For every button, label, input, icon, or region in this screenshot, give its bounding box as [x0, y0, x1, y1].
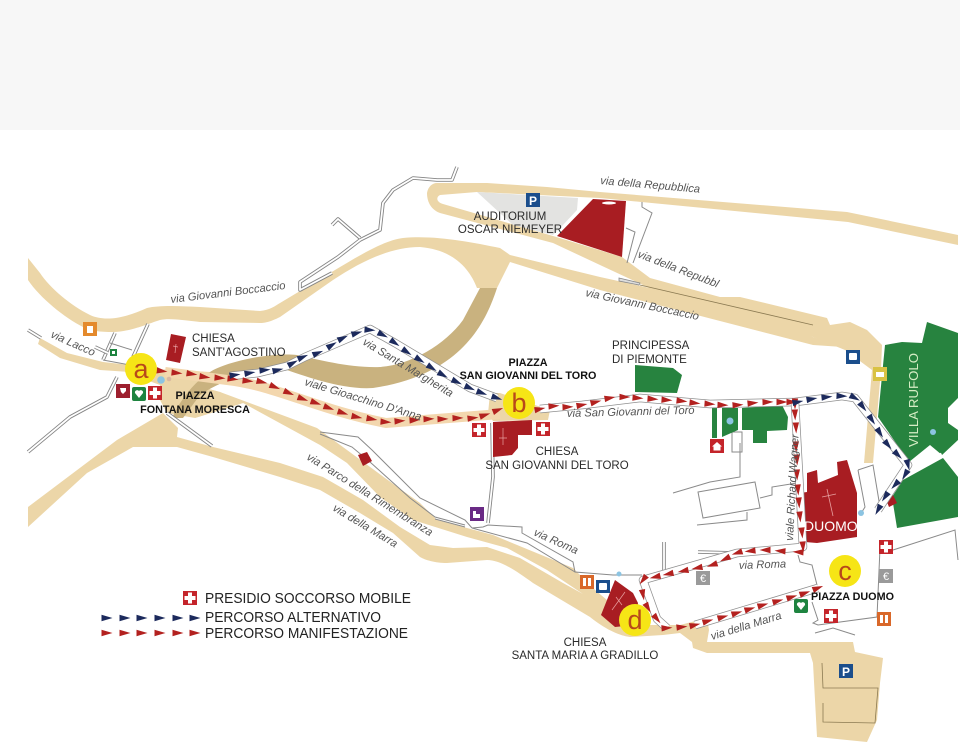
label: Auditorium Oscar Niemeyer: OSCAR NIEMEYER [458, 224, 562, 236]
icon: bus lower [596, 580, 610, 593]
route: percorso manifestazione (red arrows) a to b [162, 371, 498, 422]
road labels: via della Marra [709, 610, 783, 643]
marker d: d [627, 605, 643, 635]
building: auditorium parking [477, 192, 578, 235]
icon: euro duomo: € [883, 571, 889, 583]
label: Piazza Fontana Moresca: PIAZZA [176, 390, 214, 402]
icon: parking auditorium: P [529, 194, 537, 208]
icon: small green marker [110, 349, 117, 356]
thin markings on roads and parking [640, 285, 878, 723]
icon: toilets piazza duomo [877, 612, 891, 626]
icon: bus upper [846, 350, 860, 364]
icon: first aid piazza duomo [824, 609, 838, 623]
road labels: via della Repubbl [636, 249, 721, 291]
label: Piazza San Giovanni del Toro: SAN GIOVANNI DEL TORO [460, 370, 596, 382]
marker c [829, 555, 861, 587]
road labels [49, 175, 802, 643]
label: Chiesa Santa Maria a Gradillo: CHIESA [564, 637, 606, 649]
label: Principessa di Piemonte: PRINCIPESSA [612, 340, 689, 352]
icon: first aid b left [472, 423, 486, 437]
icon: toilets fontana moresca [116, 384, 130, 398]
road labels: via della Repubblica [600, 175, 701, 196]
road labels: via Giovanni Boccaccio [170, 280, 286, 306]
icon: red house [710, 439, 724, 453]
icon: euro via Roma: € [700, 573, 706, 585]
building: Santa Maria a Gradillo [601, 580, 638, 627]
building: Chiesa San Giovanni del Toro [493, 420, 532, 457]
route: street beds [230, 329, 908, 628]
building: Duomo [800, 460, 857, 543]
route: percorso manifestazione (red arrows) b to via Wagner [540, 397, 792, 409]
label: Duomo: DUOMO [804, 518, 858, 534]
route: percorso alternativo (blue arrows) via Santa Margherita [235, 330, 497, 398]
green areas: Villa Rufolo and gardens [635, 322, 958, 528]
label: Chiesa Sant'Agostino: CHIESA [192, 333, 235, 345]
minor streets [28, 167, 958, 635]
icon: parking auditorium [526, 193, 540, 208]
road labels: via Lacco [49, 329, 97, 359]
label: Auditorium Oscar Niemeyer: AUDITORIUM [474, 211, 546, 223]
building: auditorium Oscar Niemeyer [557, 199, 626, 257]
legend [107, 591, 411, 642]
icon: euro via Roma [696, 571, 710, 585]
marker a [125, 353, 157, 385]
icon: first aid duomo [879, 540, 893, 554]
icon: first aid a [148, 386, 162, 400]
label: Chiesa San Giovanni del Toro: CHIESA [536, 446, 578, 458]
road labels: via San Giovanni del Toro [567, 405, 695, 420]
road labels: viale Gioacchino D'Anna [303, 376, 423, 423]
label: Chiesa San Giovanni del Toro: SAN GIOVANNI DEL TORO [485, 460, 629, 472]
label: Piazza Fontana Moresca: FONTANA MORESCA [140, 404, 250, 416]
white path through the gardens [908, 455, 942, 470]
legend item: presidio soccorso mobile: PRESIDIO SOCCORSO MOBILE [205, 591, 411, 607]
route: percorso manifestazione (red arrows) via della Marra [667, 588, 818, 628]
label: Villa Rufolo: VILLA RUFOLO [906, 353, 921, 447]
route: percorso manifestazione (red arrows) via Wagner down [795, 404, 803, 547]
road labels: via Santa Margherita [360, 336, 455, 400]
road labels: via Giovanni Boccaccio [584, 287, 700, 323]
map: roads [28, 183, 958, 742]
marker b [503, 387, 535, 419]
bridge overpass [172, 288, 497, 418]
top blank band [0, 0, 960, 130]
route: percorso manifestazione (red arrows) via Roma [643, 550, 798, 619]
marker c: c [838, 556, 852, 586]
label: Principessa di Piemonte: DI PIEMONTE [612, 354, 687, 366]
small building near Villa Rufolo [885, 495, 897, 507]
road labels: via Roma [739, 558, 786, 572]
marker b: b [511, 388, 527, 418]
icon: defibrillator fontana moresca [132, 387, 146, 401]
icon: purple service [470, 507, 484, 521]
icon: parking lower: P [842, 665, 850, 679]
small chapel [358, 452, 372, 466]
peach route bed [165, 372, 500, 423]
building: Chiesa Sant'Agostino [166, 334, 186, 363]
legend item: percorso alternativo: PERCORSO ALTERNATIVO [205, 610, 381, 626]
label: Piazza San Giovanni del Toro: PIAZZA [508, 357, 548, 369]
label: Piazza Duomo: PIAZZA DUOMO [811, 591, 894, 603]
route: percorso alternativo (blue arrows) to Villa Rufolo [798, 396, 908, 510]
icon: orange service [83, 322, 97, 336]
road labels: via Parco della Rimembranza [304, 451, 435, 539]
label: Chiesa Santa Maria a Gradillo: SANTA MARIA A GRADILLO [512, 650, 658, 662]
marker d [619, 604, 651, 636]
icon: defibrillator piazza duomo [794, 599, 808, 613]
legend item: percorso manifestazione: PERCORSO MANIFESTAZIONE [205, 626, 408, 642]
icon: yellow taxi [873, 367, 887, 381]
road labels: via della Marra [330, 502, 400, 550]
icon: toilets via Roma [580, 575, 594, 589]
road labels: viale Richard Wagner [784, 433, 802, 541]
label: Chiesa Sant'Agostino: SANT'AGOSTINO [192, 347, 286, 359]
icon: parking lower [839, 664, 853, 679]
icon: first aid b right [536, 422, 550, 436]
icon: euro duomo [879, 569, 893, 583]
road labels: via Roma [532, 527, 580, 557]
marker a: a [133, 354, 149, 384]
blue fountains and dots [157, 376, 936, 576]
